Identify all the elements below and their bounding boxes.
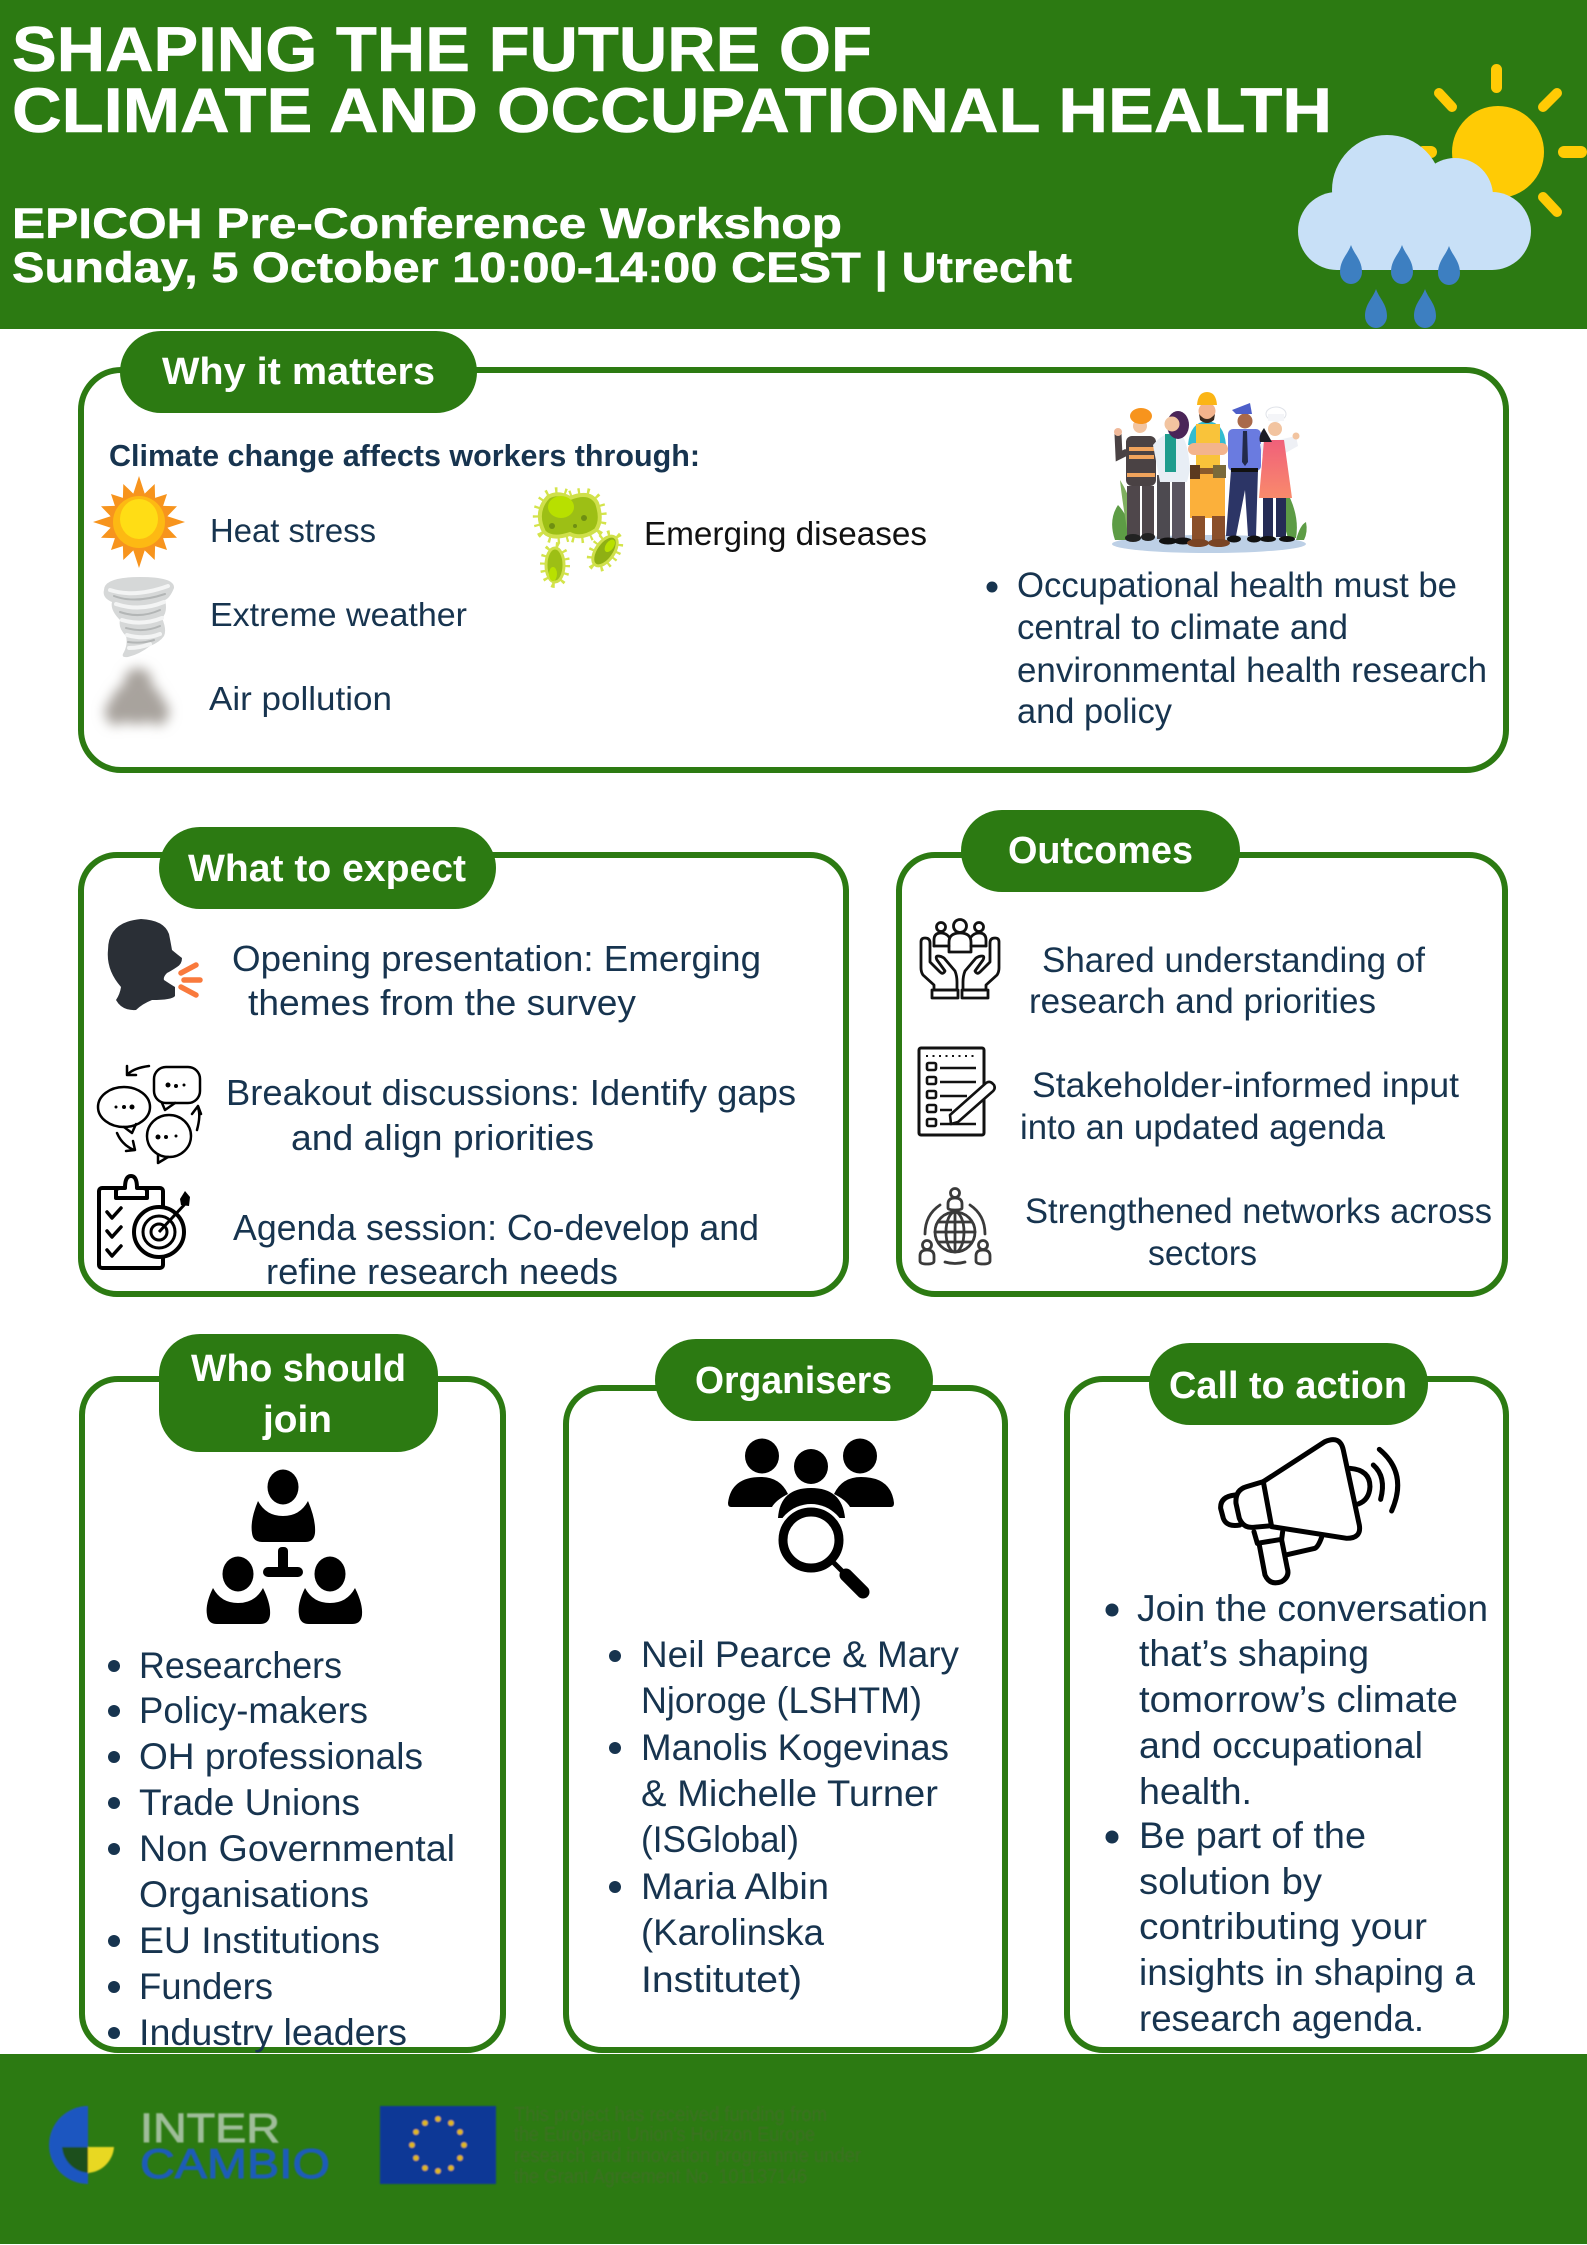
list: calls to action: research agenda. xyxy=(1139,1998,1424,2039)
funding statement: research and innovation programme under xyxy=(514,2145,861,2167)
text: shared understanding xyxy=(1029,941,1425,1021)
text: opening presentation: themes from the survey xyxy=(248,982,636,1023)
heading: what to expect xyxy=(159,827,496,909)
intro line: Climate change affects workers through: xyxy=(109,438,700,473)
text: breakout discussions: Breakout discussions: Identify gaps xyxy=(226,1072,796,1113)
subtitle: event and date: EPICOH Pre-Conference Workshop xyxy=(12,200,842,248)
text: strengthened networks: sectors xyxy=(1148,1234,1257,1273)
text: stakeholder input: Stakeholder-informed input xyxy=(1032,1066,1459,1105)
text: shared understanding: Shared understanding of xyxy=(1042,941,1425,980)
list: organisers: Institutet) xyxy=(641,1959,802,2000)
icon: tornado xyxy=(104,577,174,657)
heading: outcomes xyxy=(961,810,1240,892)
icon: team with magnifier xyxy=(728,1438,894,1592)
text: extreme weather: Extreme weather xyxy=(210,596,467,633)
list: organisers: (Karolinska xyxy=(641,1912,824,1953)
list: audiences: Researchers xyxy=(139,1645,342,1686)
list: calls to action: solution by xyxy=(1139,1861,1323,1902)
icon: discussion bubbles xyxy=(98,1066,201,1163)
list: calls to action: contributing your xyxy=(1139,1906,1427,1947)
list: organisers: Njoroge (LSHTM) xyxy=(641,1680,922,1721)
panel: call to action xyxy=(1067,1343,1506,2050)
heading: who should join: Who should xyxy=(191,1348,406,1390)
text: agenda session xyxy=(233,1207,759,1292)
panel: organisers xyxy=(566,1339,1005,2050)
icon: smoke xyxy=(105,668,169,725)
subtitle: event and date: Sunday, 5 October 10:00-14:00 CEST | Utrecht xyxy=(12,244,1072,292)
text: opening presentation: Opening presentation: Emerging xyxy=(232,938,761,979)
bullet: occupational health: environmental health research xyxy=(1017,651,1487,690)
text: emerging diseases: Emerging diseases xyxy=(644,515,927,552)
text: strengthened networks xyxy=(1025,1192,1492,1273)
icon: checklist with pencil xyxy=(919,1048,995,1135)
heading: call to action xyxy=(1149,1343,1428,1425)
logo: Inter Cambio: INTER xyxy=(140,2105,280,2151)
list: calls to action: and occupational xyxy=(1139,1725,1423,1766)
text: agenda session: Agenda session: Co-develop and xyxy=(233,1207,759,1248)
footer band with logos xyxy=(0,2054,1587,2244)
heading: organisers xyxy=(655,1339,933,1421)
subtitle: event and date xyxy=(12,200,1072,292)
text: shared understanding: research and priorities xyxy=(1029,982,1376,1021)
list: audiences: OH professionals xyxy=(139,1736,423,1777)
text: air pollution: Air pollution xyxy=(209,680,392,717)
bullet: occupational health: central to climate and xyxy=(1017,608,1348,647)
icon: people hierarchy xyxy=(207,1470,362,1624)
list: audiences xyxy=(108,1645,455,2053)
list: organisers: (ISGlobal) xyxy=(641,1819,799,1860)
icon: heat sun xyxy=(93,476,185,568)
heading: why it matters: Why it matters xyxy=(162,351,435,393)
funding statement: the Grant Agreement No. 101137146 xyxy=(514,2166,807,2188)
bullet: occupational health xyxy=(986,566,1487,731)
list: organisers: Manolis Kogevinas xyxy=(641,1727,949,1768)
logo: Inter Cambio xyxy=(49,2105,330,2187)
icon: speaking head xyxy=(108,919,200,1010)
list: audiences: EU Institutions xyxy=(139,1920,380,1961)
logo: EU flag xyxy=(380,2106,496,2184)
list: organisers xyxy=(609,1634,959,2000)
heading: call to action: Call to action xyxy=(1169,1365,1407,1407)
icon: germs xyxy=(540,494,622,582)
list: audiences: Policy-makers xyxy=(139,1690,368,1731)
funding statement xyxy=(514,2104,861,2188)
icon: sun behind rain cloud xyxy=(1298,64,1587,328)
illustration: group of workers xyxy=(1112,392,1307,553)
logo: Inter Cambio: CAMBIO xyxy=(140,2140,330,2187)
list: audiences: Organisations xyxy=(139,1874,369,1915)
panel: outcomes xyxy=(899,810,1505,1294)
text: stakeholder input: into an updated agenda xyxy=(1020,1108,1386,1147)
text: breakout discussions xyxy=(226,1072,796,1158)
heading: what to expect: What to expect xyxy=(188,848,466,890)
title: SHAPING THE FUTURE OF xyxy=(12,15,872,85)
heading: outcomes: Outcomes xyxy=(1008,830,1193,872)
list: calls to action: that’s shaping xyxy=(1139,1633,1369,1674)
header banner xyxy=(0,0,1587,329)
icon: hands holding people xyxy=(921,920,999,998)
list: calls to action xyxy=(1106,1588,1488,2039)
list: calls to action: insights in shaping a xyxy=(1139,1952,1475,1993)
bullet: occupational health: and policy xyxy=(1017,692,1172,731)
list: audiences: Non Governmental xyxy=(139,1828,455,1869)
list: organisers: & Michelle Turner xyxy=(641,1773,938,1814)
funding statement: This project has received funding from xyxy=(514,2104,827,2126)
text: opening presentation xyxy=(232,938,761,1023)
heading: who should join: join xyxy=(262,1399,332,1441)
panel: why it matters xyxy=(81,331,1506,770)
list: calls to action: health. xyxy=(1139,1771,1252,1812)
list: organisers: Neil Pearce & Mary xyxy=(641,1634,959,1675)
list: calls to action: Be part of the xyxy=(1139,1815,1366,1856)
funding statement: the European Union's Horizon Europe xyxy=(514,2124,815,2146)
text: agenda session: refine research needs xyxy=(266,1251,618,1292)
bullet: occupational health: Occupational health must be xyxy=(1017,566,1457,605)
panel: who should join xyxy=(82,1334,503,2053)
title xyxy=(12,15,1332,146)
list: audiences: Industry leaders xyxy=(139,2012,407,2053)
list: audiences: Funders xyxy=(139,1966,273,2007)
heading: organisers: Organisers xyxy=(695,1360,892,1402)
list: calls to action: tomorrow’s climate xyxy=(1139,1679,1458,1720)
list: calls to action: Join the conversation xyxy=(1137,1588,1488,1629)
icon: megaphone xyxy=(1221,1440,1398,1583)
heading: why it matters xyxy=(120,331,477,413)
icon: global network xyxy=(920,1188,990,1264)
heading: who should join xyxy=(159,1334,438,1452)
icon: clipboard with target xyxy=(99,1176,190,1268)
panel: what to expect xyxy=(81,827,846,1294)
text: strengthened networks: Strengthened networks across xyxy=(1025,1192,1492,1231)
list: organisers: Maria Albin xyxy=(641,1866,829,1907)
text: heat stress: Heat stress xyxy=(210,512,376,549)
title: CLIMATE AND OCCUPATIONAL HEALTH xyxy=(12,76,1332,146)
text: breakout discussions: and align priorities xyxy=(291,1117,594,1158)
text: stakeholder input xyxy=(1020,1066,1459,1147)
list: audiences: Trade Unions xyxy=(139,1782,360,1823)
